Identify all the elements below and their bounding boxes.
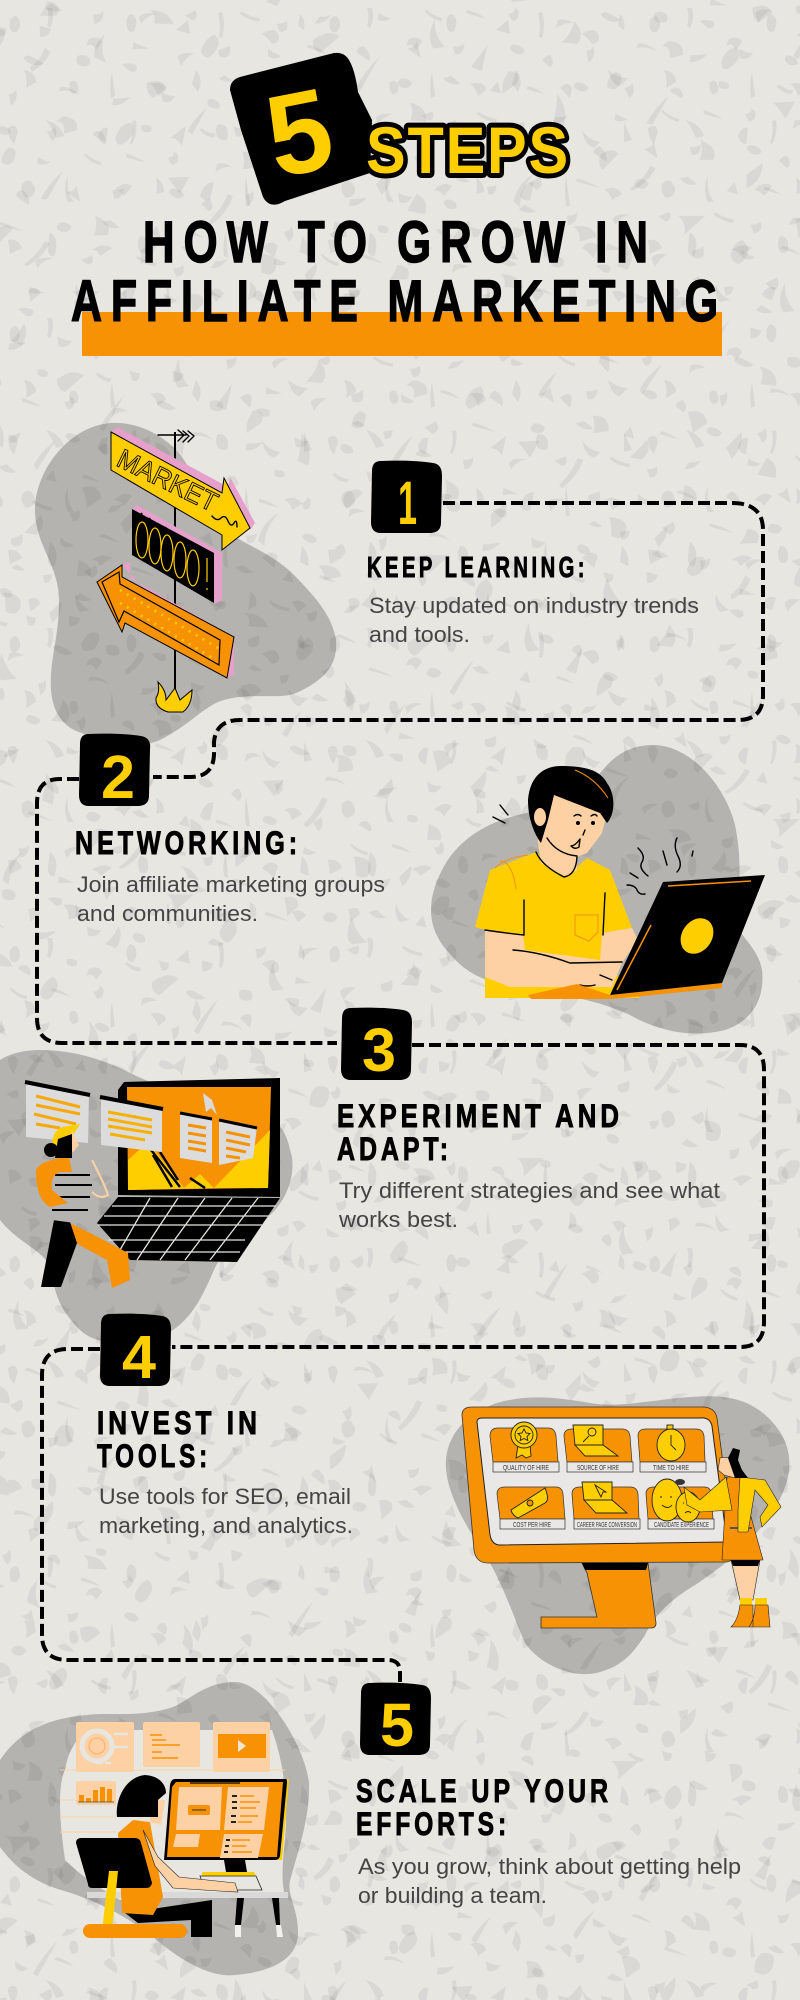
blob: step 2 backdrop (431, 745, 763, 1034)
monitor (224, 1860, 247, 1872)
dashboard cards: COST PER HIRE (513, 1522, 551, 1529)
connector: 2 to 3 (37, 779, 337, 1043)
illustration: signpost: MARKET (112, 443, 223, 518)
number badge 1: 1 (398, 469, 417, 537)
floating panels (60, 1722, 285, 1832)
blob: step 3 backdrop (0, 1050, 293, 1343)
heading: EFFORTS: (356, 1806, 510, 1842)
connector: 1 to 2 (153, 503, 763, 777)
body text: or building a team. (358, 1883, 547, 1908)
body text: Try different strategies and see what (339, 1178, 720, 1203)
dashboard cards: CANDIDATE EXPERIENCE (654, 1522, 709, 1529)
heading: INVEST IN (97, 1405, 261, 1441)
body text: Use tools for SEO, email (99, 1484, 351, 1509)
panel: step 3 (25, 1008, 720, 1288)
body text: As you grow, think about getting help (358, 1854, 741, 1879)
illustration: man at laptop (475, 766, 765, 999)
panel: step 2 (75, 734, 765, 999)
number badge 4 (100, 1314, 171, 1391)
card icons (511, 1422, 700, 1522)
illustration: woman at desk (60, 1722, 289, 1938)
connector: 4 to 5 (42, 1349, 400, 1682)
number badge 2 (79, 734, 150, 811)
dashboard cards: TIME TO HIRE (653, 1465, 689, 1472)
body text: and communities. (77, 901, 258, 926)
body text (358, 1854, 741, 1908)
heading: KEEP LEARNING: (367, 552, 588, 584)
body text: Stay updated on industry trends (369, 593, 699, 618)
connector: 3 to 4 (172, 1045, 764, 1347)
number badge 1 (371, 461, 442, 537)
heading (97, 1405, 261, 1474)
dashboard cards: QUALITY OF HIRE (503, 1465, 549, 1472)
body text: and tools. (369, 622, 470, 647)
heading: ADAPT: (337, 1131, 452, 1167)
body text (369, 593, 699, 647)
number badge 5: 5 (380, 1691, 414, 1759)
woman (125, 1900, 212, 1937)
heading: TOOLS: (97, 1438, 211, 1474)
orange highlight bar (82, 312, 722, 356)
body text (338, 1178, 720, 1232)
title block (71, 53, 727, 356)
illustration: signpost (97, 427, 255, 712)
panel: step 1 (97, 427, 699, 712)
illustration: monitor dashboard with woman (462, 1407, 781, 1628)
number badge 2: 2 (101, 743, 135, 811)
number badge 5 (360, 1683, 431, 1759)
body text: works best. (338, 1207, 458, 1232)
body text (99, 1484, 353, 1538)
illustration: laptop and woman (25, 1078, 280, 1288)
body text (77, 872, 385, 926)
body text: Join affiliate marketing groups (77, 872, 385, 897)
badge: big 5 (230, 53, 372, 205)
heading: EXPERIMENT AND (337, 1098, 623, 1134)
heading (337, 1098, 623, 1167)
blob: step 4 backdrop (446, 1396, 789, 1674)
dashboard cards: SOURCE OF HIRE (577, 1465, 619, 1472)
number badge 3 (341, 1008, 412, 1084)
desk (87, 1892, 288, 1898)
heading: SCALE UP YOUR (356, 1773, 612, 1809)
number badge 3: 3 (362, 1016, 396, 1084)
word: STEPS: STEPS (366, 113, 570, 187)
panel: step 4 (97, 1314, 781, 1628)
dashboard cards (490, 1428, 714, 1529)
heading (356, 1773, 612, 1842)
woman presenting (675, 1448, 781, 1627)
heading: NETWORKING: (75, 825, 301, 861)
panel: step 5 (60, 1683, 741, 1938)
badge: big 5: 5 (256, 64, 343, 203)
dashboard cards: CAREER PAGE CONVERSION (577, 1522, 637, 1529)
blob: step 1 backdrop (35, 423, 336, 746)
blob: step 5 backdrop (0, 1682, 309, 1975)
body text: marketing, and analytics. (99, 1513, 353, 1538)
number badge 4: 4 (122, 1323, 156, 1391)
